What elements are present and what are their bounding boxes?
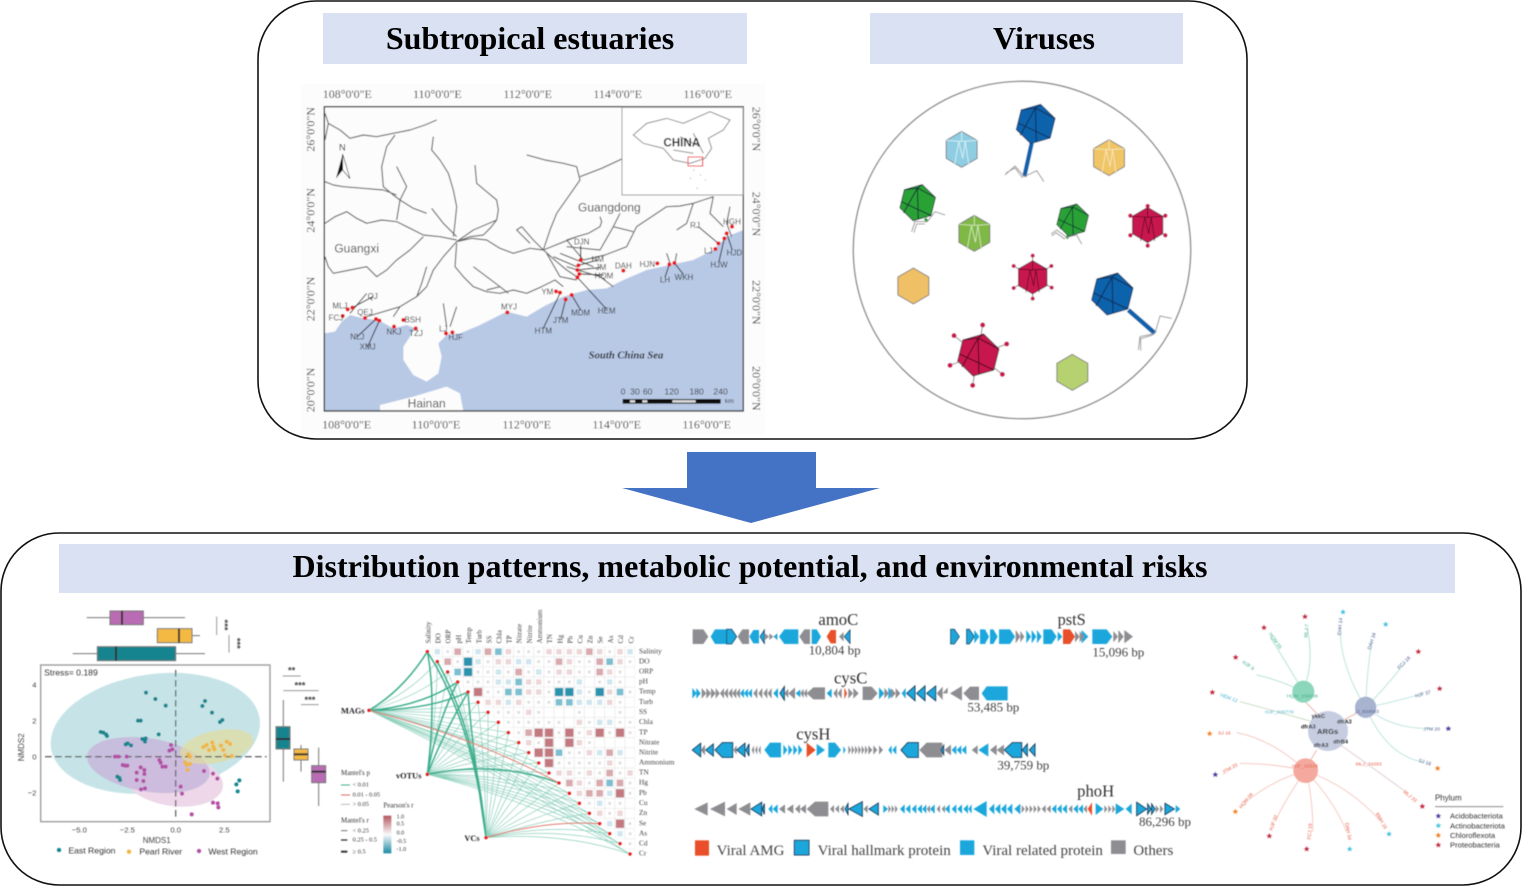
genome: cysC: 53,485 bp xyxy=(967,699,1019,714)
chart: ARG host network xyxy=(1207,609,1506,851)
NMDS legend: East Region xyxy=(68,845,116,855)
station labels: LJ xyxy=(704,247,713,256)
station labels: MLJ xyxy=(332,302,348,311)
heatmap column labels: TP xyxy=(506,635,514,643)
genome: pstS xyxy=(951,610,1144,660)
heatmap row labels: SS xyxy=(639,707,647,716)
panel: bottom results xyxy=(1,533,1521,885)
icon: red spiked virus 1 xyxy=(1130,206,1165,246)
node and leaf labels: DAH 34 xyxy=(1343,822,1352,841)
phylum legend xyxy=(1435,793,1506,850)
heatmap column labels: Chla xyxy=(495,630,503,643)
heatmap column labels: Cu xyxy=(577,635,585,643)
node and leaf labels: HJF 37 xyxy=(1415,690,1432,700)
map frame xyxy=(324,107,743,411)
map longitude and latitude labels: 26°0'0"N xyxy=(750,107,764,152)
axis labels and stress: 4 xyxy=(32,681,37,690)
station labels xyxy=(329,217,742,351)
genome: cysC xyxy=(692,668,1019,714)
Mantel links thick xyxy=(369,652,559,838)
heatmap row labels: Nitrite xyxy=(639,747,658,756)
map longitude and latitude labels: 116°0'0"E xyxy=(682,417,731,431)
genome: pstS: pstS xyxy=(1058,610,1086,629)
heading: Viruses: Viruses xyxy=(993,20,1095,56)
region names: Hainan xyxy=(408,396,446,410)
chart: viral genome maps lower xyxy=(692,724,1191,859)
Pearson colour scale: 1.0 xyxy=(397,815,404,821)
top boxplots xyxy=(73,611,229,661)
chart: viral genome maps xyxy=(692,610,1144,714)
phylum legend: Actinobacteriota xyxy=(1450,821,1506,830)
heading: distribution patterns: Distribution patterns, metabolic potential, and environmental risks xyxy=(292,548,1208,584)
station labels: HJF xyxy=(448,333,463,342)
station labels: MDM xyxy=(571,308,590,317)
node and leaf labels: JTM 20 xyxy=(1423,726,1440,732)
network source labels: VCs xyxy=(464,834,480,843)
icon: blue tailed phage 1 xyxy=(1005,100,1058,182)
heatmap row labels: Pb xyxy=(639,788,647,797)
map longitude and latitude labels: 112°0'0"E xyxy=(503,87,552,101)
station labels: DJN xyxy=(574,238,590,247)
station labels: BSH xyxy=(404,315,421,324)
module node red xyxy=(1293,758,1318,783)
map longitude and latitude labels: 26°0'0"N xyxy=(303,107,317,152)
heatmap grid xyxy=(432,647,635,849)
right boxplots xyxy=(276,676,326,806)
station labels: HJN xyxy=(640,260,655,269)
node and leaf labels: MLJ_34293 xyxy=(1356,761,1382,767)
NMDS plot frame xyxy=(41,665,270,822)
Mantel legend: Mantel's r xyxy=(341,817,370,825)
axis labels and stress: NMDS2 xyxy=(17,733,26,761)
Pearson colour scale: -1.0 xyxy=(397,847,406,853)
phylum legend: Proteobacteria xyxy=(1450,841,1501,850)
Mantel legend: ≥ 0.5 xyxy=(353,848,366,855)
NMDS ellipses xyxy=(43,660,268,813)
genome legend xyxy=(695,840,1173,859)
heatmap column labels: As xyxy=(607,635,615,643)
node and leaf labels: MLJ 33 xyxy=(1401,789,1418,804)
heatmap column labels: Salinity xyxy=(425,621,433,643)
map scale bar: 120 xyxy=(664,387,679,397)
node and leaf labels: FCJ 19 xyxy=(1307,823,1314,840)
node and leaf labels: HQM 55 xyxy=(1267,632,1283,651)
phylum legend: Acidobacteriota xyxy=(1450,812,1504,821)
axis labels and stress: NMDS1 xyxy=(143,836,171,845)
ARGs hub node xyxy=(1308,711,1348,751)
top boxplot significance: *** xyxy=(219,620,229,631)
circle boundary xyxy=(853,81,1191,419)
chart: NMDS ordination with boxplots xyxy=(17,611,326,857)
heatmap row labels: TP xyxy=(639,727,648,736)
map longitude and latitude labels: 20°0'0"N xyxy=(303,367,317,412)
map scale bar: 30 xyxy=(630,387,640,397)
heatmap row labels: Cd xyxy=(639,838,648,847)
map longitude and latitude labels: 108°0'0"E xyxy=(322,417,371,431)
genome: amoC xyxy=(693,610,861,658)
heatmap row labels: Zn xyxy=(639,808,647,817)
genome: cysH: 39,759 bp xyxy=(997,757,1049,772)
map longitude and latitude labels: 24°0'0"N xyxy=(303,188,317,233)
heatmap row labels: Hg xyxy=(639,778,648,787)
heatmap column labels: Turb xyxy=(475,629,483,643)
axis labels and stress: −2.5 xyxy=(120,826,135,835)
map scale bar: 0 xyxy=(621,387,626,397)
axis labels and stress: Stress= 0.189 xyxy=(44,667,98,677)
network source labels: vOTUs xyxy=(396,771,422,780)
host phylum stars xyxy=(1207,609,1451,851)
heatmap row labels: Temp xyxy=(639,687,656,696)
map rivers xyxy=(325,113,732,327)
Mantel legend: 0.01 - 0.05 xyxy=(353,792,380,799)
Pearson colour scale xyxy=(383,802,414,853)
heatmap column labels: Hg xyxy=(556,634,564,643)
node and leaf labels xyxy=(1218,617,1440,841)
node and leaf labels: MLJ 7 xyxy=(1303,624,1311,638)
heatmap diagonal nodes xyxy=(369,652,630,854)
region names: Guangdong xyxy=(578,200,641,214)
station labels: DAH xyxy=(615,261,632,270)
phylum legend: Chloroflexota xyxy=(1450,831,1496,840)
map longitude and latitude labels: 110°0'0"E xyxy=(413,87,462,101)
network source labels: MAGs xyxy=(341,706,365,715)
map longitude and latitude labels: 108°0'0"E xyxy=(323,87,372,101)
station labels: MYJ xyxy=(501,302,517,311)
NMDS legend: Pearl River xyxy=(139,847,182,857)
heatmap row labels: ORP xyxy=(639,667,653,676)
region names xyxy=(334,200,641,410)
heatmap column labels: Temp xyxy=(465,627,473,643)
heatmap column labels: Cd xyxy=(617,635,625,643)
genome: amoC: 10,804 bp xyxy=(809,643,861,658)
Mantel legend: 0.25 - 0.5 xyxy=(353,837,377,844)
module node teal xyxy=(1292,681,1314,703)
heading: Subtropical estuaries: Subtropical estuaries xyxy=(386,20,674,56)
map inset of China xyxy=(622,107,743,195)
heatmap light cells xyxy=(437,652,630,844)
region names: Guangxi xyxy=(334,241,379,255)
station labels: HJD xyxy=(727,248,742,257)
heatmap column labels: Nitrate xyxy=(516,624,524,643)
node and leaf labels: SJ 18 xyxy=(1418,758,1432,768)
genome: cysC: cysC xyxy=(834,668,867,687)
map scale bar: 240 xyxy=(713,387,728,397)
zero reference lines xyxy=(45,670,267,817)
genome: pstS: 15,096 bp xyxy=(1092,645,1144,660)
map longitude and latitude labels xyxy=(303,87,764,431)
map longitude and latitude labels: 110°0'0"E xyxy=(412,417,460,431)
heatmap column labels: SS xyxy=(485,635,493,643)
heatmap column labels: TN xyxy=(546,634,554,643)
heatmap row labels: pH xyxy=(639,677,649,686)
node and leaf labels: HJF_10328 xyxy=(1292,764,1318,770)
genome legend: Viral hallmark protein xyxy=(818,843,951,859)
node and leaf labels: SJ 16 xyxy=(1218,730,1231,736)
heatmap column labels: DO xyxy=(435,633,443,643)
Pearl River points xyxy=(185,742,232,770)
phylum legend: Phylum xyxy=(1435,793,1462,802)
icon: red spiked virus 2 xyxy=(1014,256,1052,299)
axis labels and stress: 2 xyxy=(32,716,36,725)
Pearson colour scale: Pearson's r xyxy=(383,802,414,810)
station labels: XMJ xyxy=(360,342,376,351)
map longitude and latitude labels: 112°0'0"E xyxy=(502,417,551,431)
heatmap row labels: Turb xyxy=(639,697,653,706)
node and leaf labels: BMH 16 xyxy=(1374,812,1388,831)
north arrow: N xyxy=(339,143,346,153)
heatmap column labels: Nitrite xyxy=(526,625,534,643)
genome: cysH: cysH xyxy=(796,724,830,743)
map longitude and latitude labels: 20°0'0"N xyxy=(750,366,764,411)
map longitude and latitude labels: 22°0'0"N xyxy=(303,276,317,321)
heatmap row labels: Cr xyxy=(639,849,647,858)
heatmap column labels: Se xyxy=(597,636,605,643)
hub labels: dfrB4 xyxy=(1333,740,1349,746)
Pearson colour scale: -0.5 xyxy=(397,839,406,845)
station labels: HJW xyxy=(710,261,728,270)
arrow: flow down xyxy=(622,452,880,523)
right boxplot significance xyxy=(288,666,316,705)
node and leaf labels: HEM 12 xyxy=(1219,692,1238,704)
chart: Mantel network and correlation heatmap xyxy=(341,609,675,858)
map scale bar: km xyxy=(725,398,734,405)
panel: top study overview xyxy=(258,1,1247,439)
genome: amoC: amoC xyxy=(818,610,858,629)
right boxplot significance: *** xyxy=(305,695,316,705)
node and leaf labels: JTM 20 xyxy=(1221,762,1239,776)
node and leaf labels: EHH 14 xyxy=(1337,617,1344,636)
heatmap row labels: Salinity xyxy=(639,646,662,655)
heading: Subtropical estuaries xyxy=(323,13,747,64)
map: sampling sites on the South China coast xyxy=(301,84,765,434)
heatmap row labels: Ammonium xyxy=(639,758,675,767)
hub labels: ARGs xyxy=(1317,727,1338,736)
station labels: HEM xyxy=(598,307,616,316)
station labels: JM xyxy=(596,263,606,272)
heatmap column labels: Cr xyxy=(627,636,635,643)
heatmap row labels: Chla xyxy=(639,717,654,726)
network source labels xyxy=(341,706,480,843)
module node slate xyxy=(1355,697,1376,718)
Pearson colour scale: 0.0 xyxy=(397,830,404,836)
icon: green tailed phage 1 xyxy=(898,181,945,233)
station labels: NLJ xyxy=(350,332,364,341)
heatmap row labels xyxy=(639,646,675,858)
panel: virus illustrations xyxy=(853,81,1191,419)
heatmap row labels: Se xyxy=(639,818,646,827)
heatmap column labels: Ammonium xyxy=(536,609,544,643)
top boxplot significance: *** xyxy=(232,638,242,649)
heatmap column labels: ORP xyxy=(445,630,453,643)
station labels: FCJ xyxy=(329,314,343,323)
heatmap row labels: DO xyxy=(639,656,650,665)
network links xyxy=(1237,627,1432,832)
axis labels and stress: 0 xyxy=(32,752,36,761)
station labels: YM xyxy=(541,287,553,296)
hub labels xyxy=(1301,714,1352,749)
node and leaf labels: HJF 9 xyxy=(1241,660,1255,672)
map longitude and latitude labels: 24°0'0"N xyxy=(750,192,764,237)
station labels: QEJ xyxy=(357,308,373,317)
hub labels: ykkC xyxy=(1312,714,1325,720)
station labels: HQM xyxy=(595,271,613,280)
station labels: HM xyxy=(591,255,604,264)
NMDS legend: West Region xyxy=(208,846,258,856)
heatmap row labels: TN xyxy=(639,768,649,777)
Mantel legend xyxy=(341,769,380,855)
East Region points xyxy=(101,693,239,791)
Mantel legend: < 0.01 xyxy=(353,782,369,789)
station dots xyxy=(343,227,732,333)
axis labels and stress xyxy=(17,667,230,845)
map scale bar: 60 xyxy=(643,387,653,397)
map scale bar: 180 xyxy=(689,387,704,397)
map inset of China: CHINA xyxy=(663,136,701,149)
Mantel legend: Mantel's p xyxy=(341,769,371,777)
station leader lines xyxy=(352,227,732,347)
genome: phoH: 86,296 bp xyxy=(1139,814,1191,829)
heading: distribution patterns xyxy=(59,544,1455,593)
map longitude and latitude labels: 114°0'0"E xyxy=(592,417,641,431)
map longitude and latitude labels: 22°0'0"N xyxy=(750,280,764,325)
hub labels: dfrA3 xyxy=(1301,724,1316,730)
West Region points xyxy=(115,745,218,814)
heatmap column labels: Zn xyxy=(587,635,595,643)
icon: blue tailed phage 2 xyxy=(1089,268,1172,351)
node and leaf labels: HJF 32 xyxy=(1268,814,1280,832)
Mantel links thin xyxy=(369,662,630,854)
sea name: South China Sea xyxy=(589,350,664,361)
station labels: QJ xyxy=(368,292,378,301)
heatmap column labels: pH xyxy=(455,635,463,643)
Mantel legend: < 0.25 xyxy=(353,827,369,834)
map scale bar xyxy=(621,387,734,405)
axis labels and stress: 2.5 xyxy=(219,826,230,835)
genome legend: Others xyxy=(1133,843,1173,859)
icon: red spiked virus 3 xyxy=(950,325,1007,385)
heatmap row labels: Nitrate xyxy=(639,737,659,746)
node and leaf labels: HJF_826778 xyxy=(1265,709,1294,715)
hub labels: dfrA3 xyxy=(1314,743,1328,749)
Pearson colour scale: 0.5 xyxy=(397,821,404,827)
station labels: HGH xyxy=(723,217,741,226)
station labels: JTM xyxy=(553,316,568,325)
genome: cysH xyxy=(692,724,1049,772)
station labels: TZJ xyxy=(409,329,423,338)
icon: plain capsids xyxy=(898,131,1124,390)
station labels: LJ xyxy=(439,325,448,334)
station labels: HTM xyxy=(535,326,552,335)
genome legend: Viral AMG xyxy=(717,843,785,859)
right boxplot significance: *** xyxy=(295,681,306,691)
axis labels and stress: 0.0 xyxy=(170,826,181,835)
node and leaf labels: DAH 34 xyxy=(1367,632,1378,651)
map longitude and latitude labels: 114°0'0"E xyxy=(593,87,642,101)
heatmap column labels: Pb xyxy=(566,635,574,643)
heatmap column labels xyxy=(425,609,635,643)
icon: green tailed phage 2 xyxy=(1051,200,1091,244)
map sea area xyxy=(324,230,743,411)
node and leaf labels: HQM 06 xyxy=(1238,792,1255,810)
station labels: WKH xyxy=(675,273,694,282)
station labels: RJ xyxy=(690,221,700,230)
node and leaf labels: JJ_834563 xyxy=(1354,709,1379,715)
heading: Viruses xyxy=(870,13,1183,64)
Mantel legend: > 0.05 xyxy=(353,801,369,808)
node and leaf labels: HQM_208308 xyxy=(1287,694,1318,700)
right boxplot significance: ** xyxy=(288,666,296,676)
genome: phoH xyxy=(694,782,1191,829)
station labels: LH xyxy=(660,276,670,285)
heatmap row labels: Cu xyxy=(639,798,648,807)
node and leaf labels: FCJ 18 xyxy=(1396,655,1412,671)
axis labels and stress: −5.0 xyxy=(72,826,87,835)
top boxplot significance xyxy=(219,620,242,649)
NMDS legend xyxy=(59,845,258,857)
map longitude and latitude labels: 116°0'0"E xyxy=(683,87,732,101)
heatmap row labels: As xyxy=(639,828,647,837)
axis labels and stress: −2 xyxy=(28,788,36,797)
station labels: NKJ xyxy=(386,327,402,336)
hub labels: dfrA3 xyxy=(1337,719,1352,725)
genome: phoH: phoH xyxy=(1077,782,1114,801)
Mantel links significant xyxy=(369,710,600,838)
north arrow xyxy=(336,143,350,179)
genome legend: Viral related protein xyxy=(982,843,1103,859)
